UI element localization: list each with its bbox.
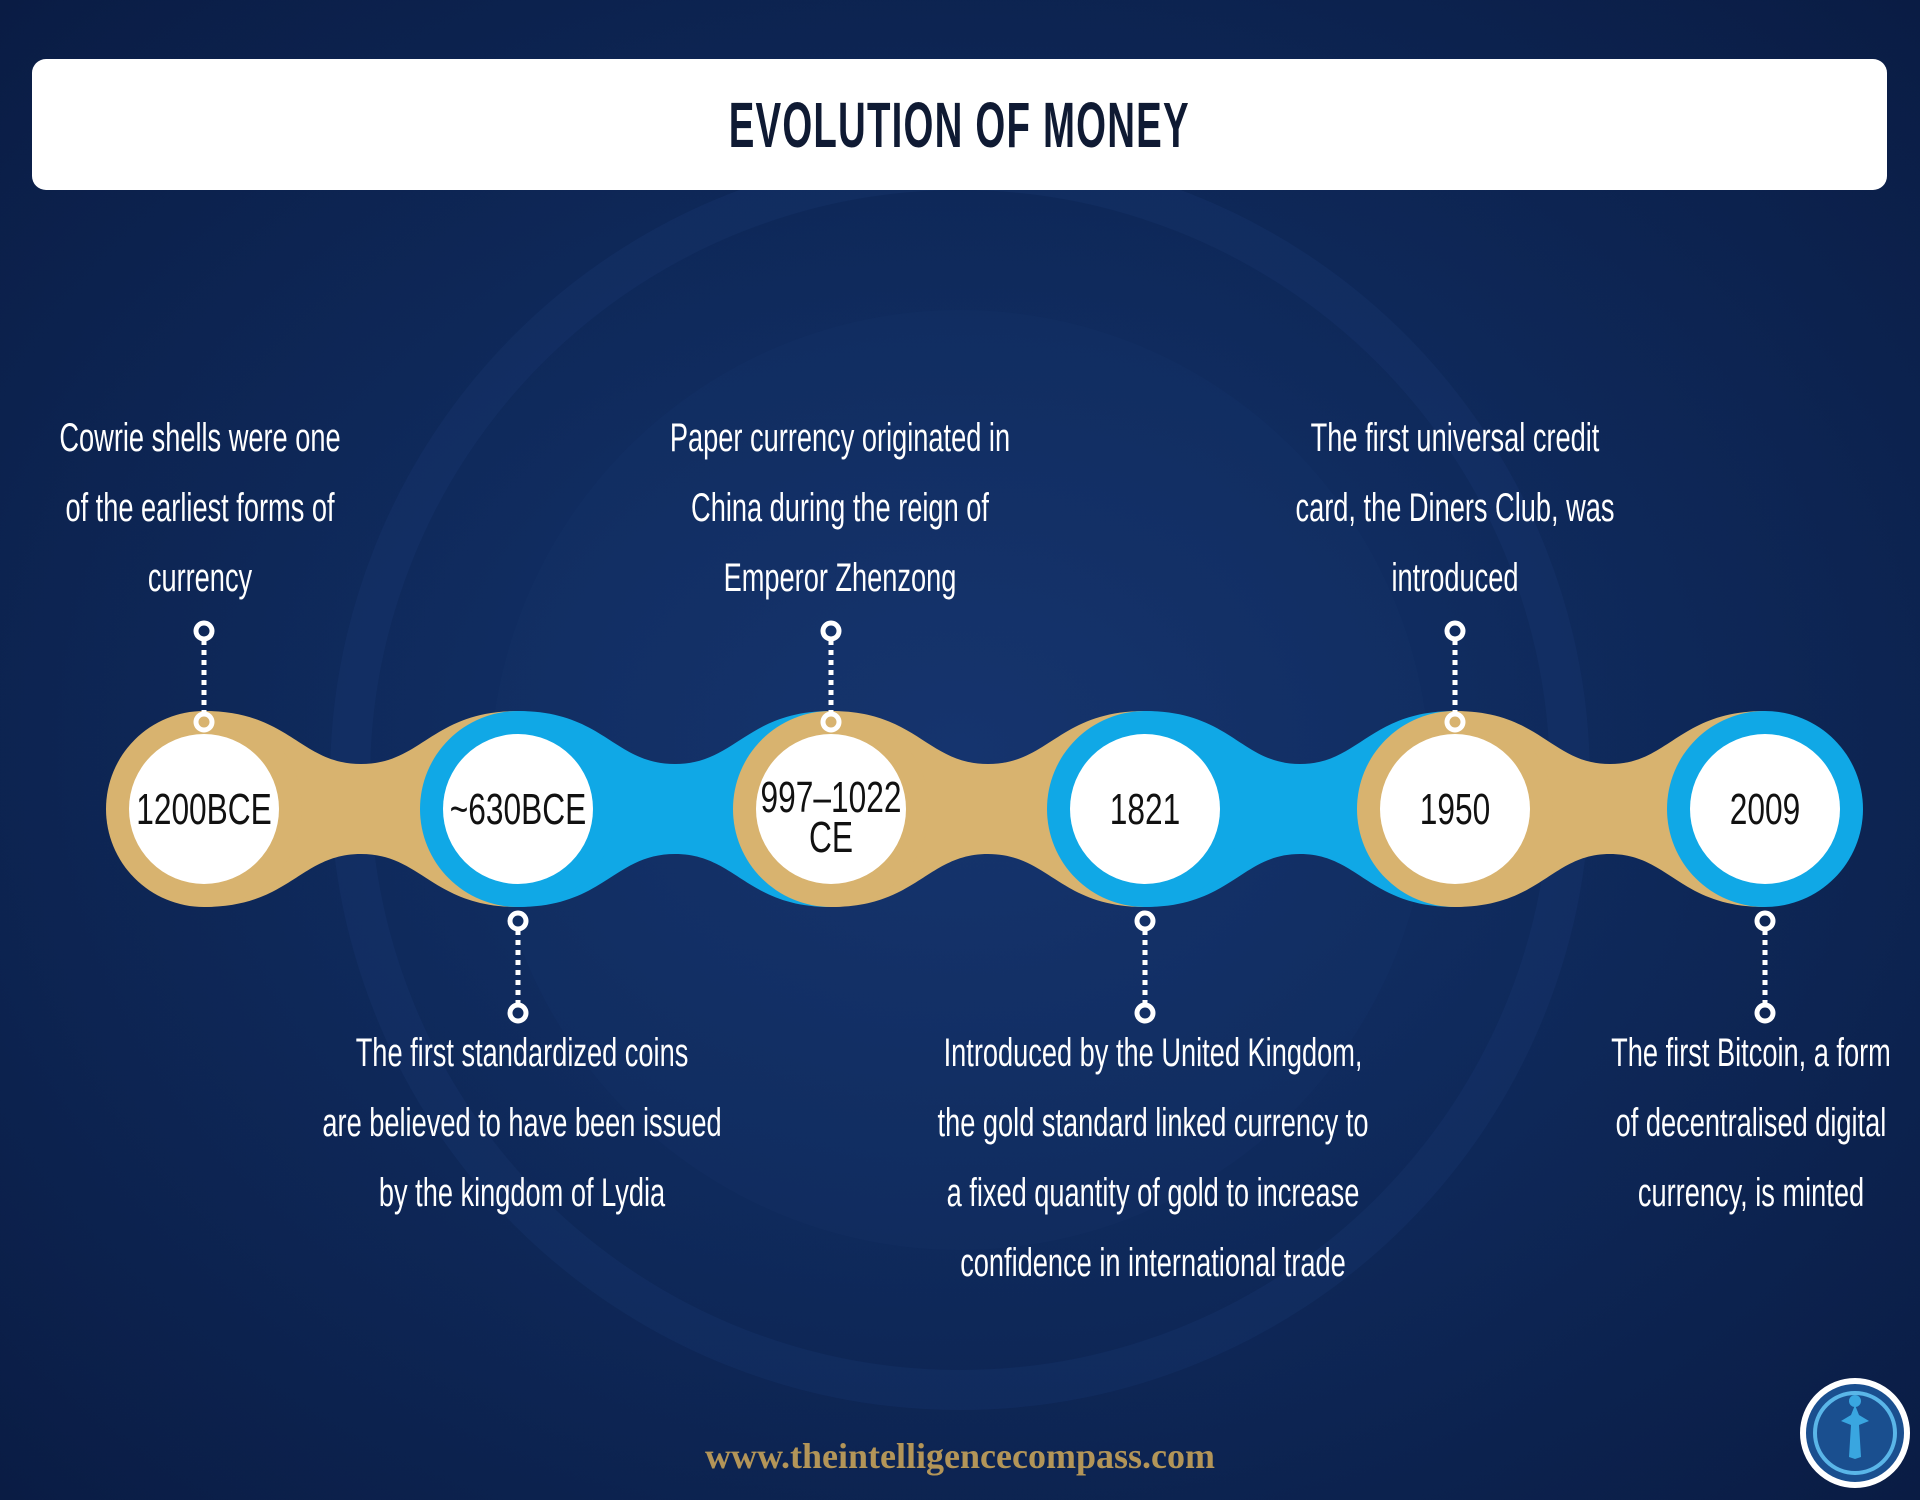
year labels: 1821	[1110, 785, 1180, 834]
year labels	[136, 773, 1800, 862]
text: 1821: confidence in international trade	[960, 1241, 1346, 1285]
text: 1950	[1296, 416, 1614, 600]
year labels: CE	[809, 813, 853, 862]
year labels: ~630BCE	[450, 785, 586, 834]
text: 1950: The first universal credit	[1311, 416, 1599, 460]
text: 2009	[1611, 1031, 1891, 1215]
text: 630BCE	[322, 1031, 722, 1215]
year labels: 997–1022	[761, 773, 901, 822]
text: 997-1022 CE: China during the reign of	[691, 486, 989, 530]
text: 1821: Introduced by the United Kingdom,	[944, 1031, 1362, 1075]
text: 630BCE: are believed to have been issued	[322, 1101, 722, 1145]
text: 997-1022 CE	[670, 416, 1010, 600]
text: 997-1022 CE: Emperor Zhenzong	[724, 556, 956, 600]
title	[32, 59, 1887, 190]
icon: logo	[1800, 1378, 1910, 1488]
text: 1200BCE: of the earliest forms of	[65, 486, 335, 530]
pins	[196, 623, 1773, 1021]
text: 1821: the gold standard linked currency to	[938, 1101, 1368, 1145]
year labels: 2009	[1730, 785, 1800, 834]
text: 1200BCE	[59, 416, 341, 600]
text: 997-1022 CE: Paper currency originated in	[670, 416, 1010, 460]
text: 2009: currency, is minted	[1638, 1171, 1864, 1215]
title: EVOLUTION OF MONEY	[729, 88, 1190, 160]
text: 1200BCE: Cowrie shells were one	[59, 416, 341, 460]
text: 1950: introduced	[1391, 556, 1519, 600]
year labels: 1950	[1420, 785, 1490, 834]
circles	[106, 711, 1863, 907]
text: 2009: of decentralised digital	[1616, 1101, 1886, 1145]
text: 1821: a fixed quantity of gold to increase	[947, 1171, 1359, 1215]
year labels: 1200BCE	[136, 785, 272, 834]
footer url: www.theintelligencecompass.com	[705, 1436, 1215, 1476]
text: 1200BCE: currency	[148, 556, 252, 600]
text: 1950: card, the Diners Club, was	[1296, 486, 1614, 530]
text: 1821	[938, 1031, 1368, 1285]
text: 2009: The first Bitcoin, a form	[1611, 1031, 1891, 1075]
text: 630BCE: by the kingdom of Lydia	[379, 1171, 665, 1215]
text: 630BCE: The first standardized coins	[356, 1031, 688, 1075]
